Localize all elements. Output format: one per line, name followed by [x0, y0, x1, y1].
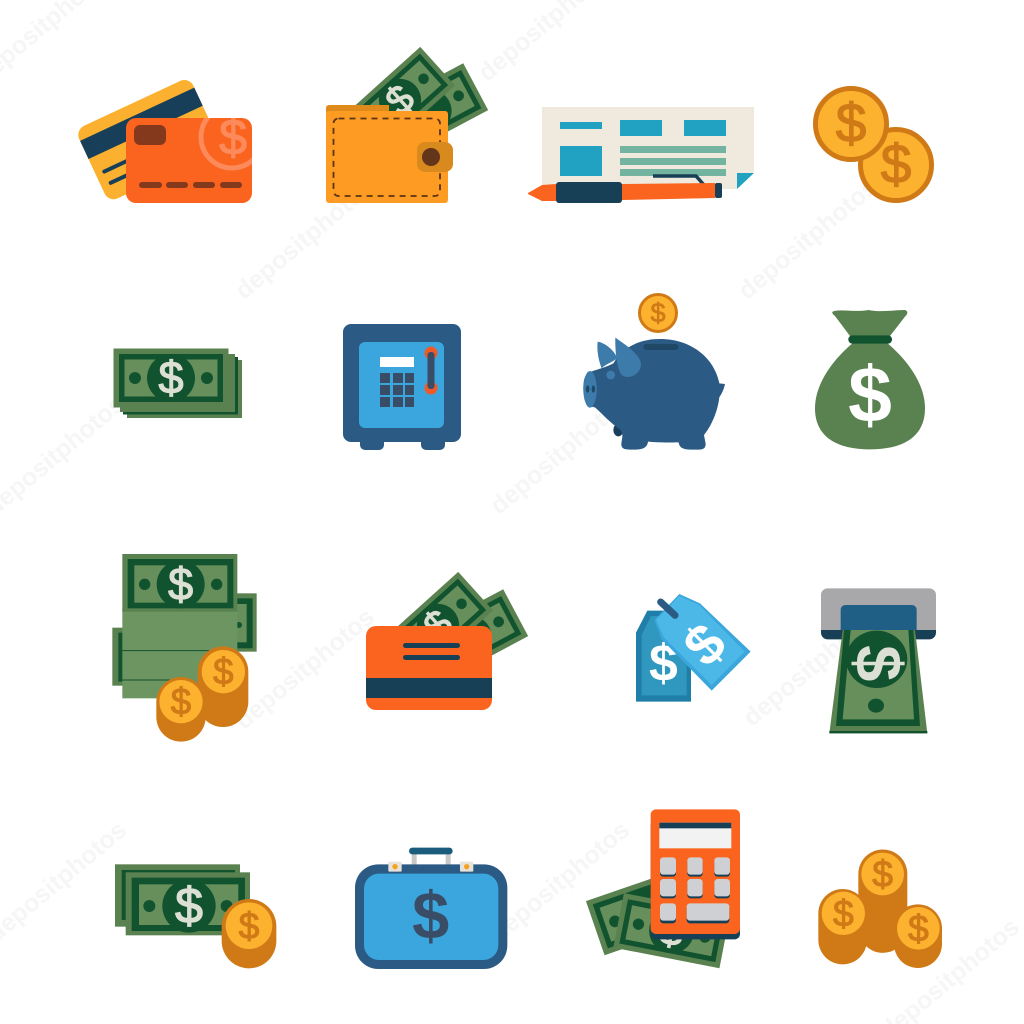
- icon: two gold coins: [816, 88, 932, 200]
- case body: [355, 864, 507, 969]
- watermarks: depositphotos: [738, 600, 888, 732]
- front banknote: [613, 893, 730, 968]
- orange card front: $: [219, 109, 247, 165]
- icon: piggy bank with coin: [583, 294, 725, 450]
- handle: [424, 346, 438, 394]
- pig: [583, 338, 725, 450]
- top banknote: $: [168, 558, 193, 609]
- wallet body: [326, 105, 448, 203]
- right stack: $: [908, 907, 929, 949]
- coin: $: [239, 904, 260, 946]
- keypad: [380, 373, 414, 407]
- icon: banknotes with coin: [115, 864, 276, 968]
- back banknote: [372, 63, 488, 159]
- back tag: $: [649, 634, 678, 692]
- emerging banknote: [829, 630, 927, 733]
- watermarks: depositphotos: [485, 816, 635, 948]
- icon: price tags: [636, 594, 751, 702]
- icon: ATM cash slot: [821, 588, 936, 733]
- emerging banknote: $: [842, 645, 915, 682]
- top banknote: $: [158, 352, 184, 403]
- left stack: $: [833, 892, 854, 934]
- safe body: [343, 324, 461, 442]
- tall coin stack: $: [213, 651, 234, 692]
- icon: briefcase: [355, 848, 507, 969]
- orange card front: [126, 118, 252, 203]
- calculator keys: [660, 857, 730, 923]
- icon: wallet with banknotes: [326, 47, 488, 203]
- front tag: $: [672, 612, 739, 679]
- back banknote: [586, 865, 710, 955]
- coin upper: $: [836, 92, 866, 154]
- watermarks: depositphotos: [733, 173, 883, 305]
- handle: [409, 848, 453, 865]
- back banknotes: [112, 593, 257, 686]
- calculator body: [651, 809, 740, 939]
- watermarks: depositphotos: [230, 173, 380, 305]
- front banknote: $: [415, 601, 461, 649]
- icon: safe: [343, 324, 461, 450]
- wallet clasp: [417, 142, 453, 172]
- coin: [222, 899, 276, 968]
- front banknote: [383, 572, 493, 678]
- short coin stack: $: [171, 681, 191, 722]
- watermarks: depositphotos: [485, 388, 635, 520]
- machine slot: [821, 588, 936, 639]
- top banknote: [122, 554, 237, 612]
- icon: money bag: [815, 310, 925, 449]
- back banknote: [115, 864, 240, 927]
- latches: [388, 862, 473, 872]
- front banknote: $: [656, 905, 688, 956]
- pen: [528, 176, 722, 203]
- top stack: $: [872, 853, 893, 895]
- safe feet: [360, 440, 445, 450]
- back banknote: [412, 589, 528, 685]
- tag string: [661, 602, 675, 615]
- yellow card back: [75, 77, 223, 203]
- front banknote: [345, 47, 455, 153]
- tall coin stack: [198, 646, 248, 727]
- slot lip: [841, 605, 917, 630]
- short coin stack: [156, 677, 206, 742]
- icon: banknotes and calculator: [586, 809, 740, 968]
- falling coin: $: [650, 298, 666, 328]
- front banknote: $: [175, 877, 203, 933]
- display: [380, 357, 414, 367]
- icon: money bag: $: [848, 351, 892, 439]
- cheque paper: [542, 107, 754, 189]
- icon: credit cards: [75, 77, 263, 203]
- orange card: [366, 626, 492, 710]
- calculator screen: [659, 823, 731, 848]
- icon: bank cheque and pen: [528, 107, 754, 203]
- watermarks: depositphotos: [230, 603, 380, 735]
- icon: three coin stacks: [818, 849, 942, 968]
- icon: card with banknotes: [366, 572, 528, 710]
- icon: banknote stack: [114, 348, 242, 418]
- dollar sign: $: [412, 879, 449, 953]
- safe door: [359, 342, 444, 428]
- front banknote: $: [377, 76, 423, 124]
- falling coin: [640, 294, 676, 332]
- coin lower: $: [881, 133, 911, 195]
- paper stack: [122, 608, 237, 698]
- front banknote: [126, 872, 250, 935]
- icon: cash stack with coins: [112, 554, 257, 742]
- case front panel: [364, 874, 498, 960]
